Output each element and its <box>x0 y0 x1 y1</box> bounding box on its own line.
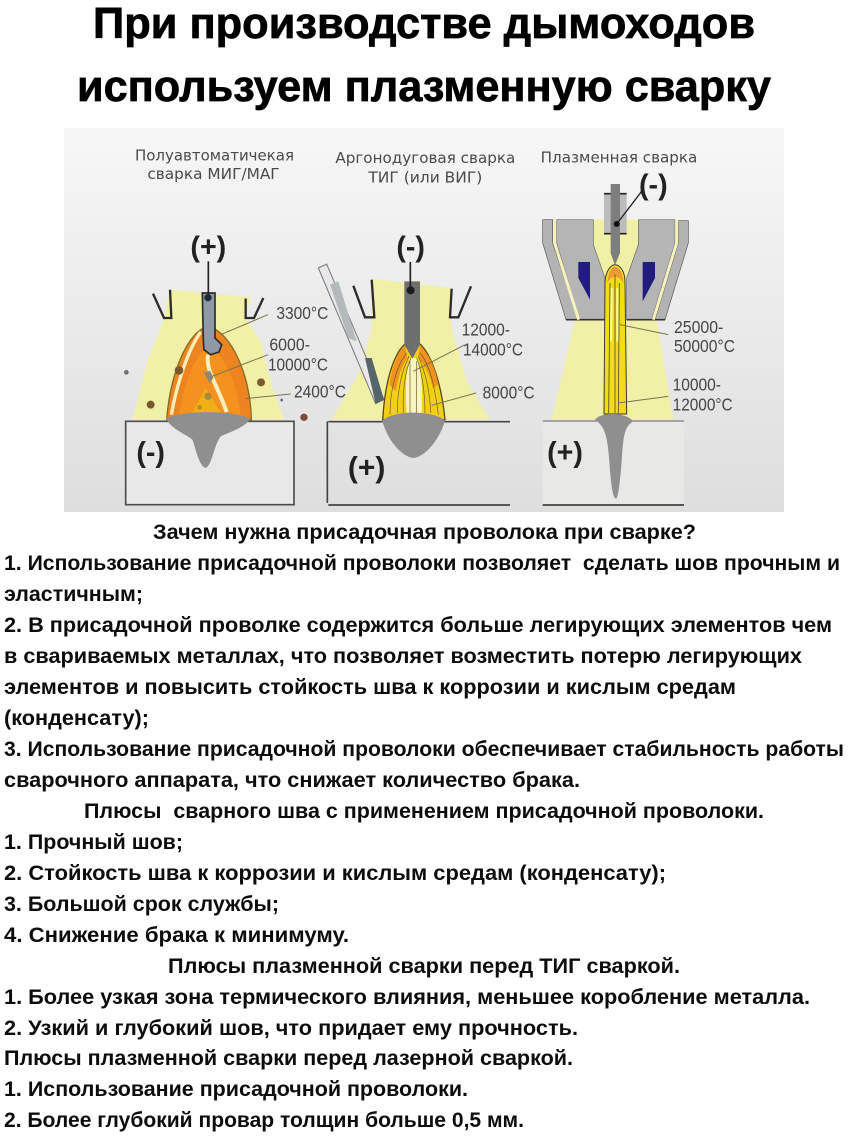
section: why filler wire is needed: в свариваемых металлах, что позволяет возместить потерю легирующих <box>4 645 802 668</box>
section: why filler wire is needed <box>4 521 844 792</box>
tungsten electrode <box>404 262 420 359</box>
plasma torch nozzle <box>543 220 688 320</box>
section: advantages of the seam with filler wire: 3. Большой срок службы; <box>4 893 279 916</box>
tungsten electrode <box>604 184 642 265</box>
filler rod <box>318 264 384 404</box>
panel: plasma welding <box>541 149 735 505</box>
caption: plasma: Плазменная сварка <box>541 149 697 166</box>
title: используем плазменную сварку <box>77 62 772 111</box>
temperature labels: 8000°C <box>483 383 535 403</box>
section: why filler wire is needed: элементов и повысить стойкость шва к коррозии и кислым средам <box>4 676 736 699</box>
section: why filler wire is needed: Зачем нужна присадочная проволока при сварке? <box>153 521 696 544</box>
caption: MIG/MAG: Полуавтоматичекая <box>135 147 294 164</box>
temperature labels: 14000°C <box>463 339 523 359</box>
section: plasma versus TIG <box>4 955 810 1040</box>
weld pool <box>166 412 251 468</box>
gas nozzles <box>353 280 471 317</box>
section: plasma versus TIG: 1. Более узкая зона термического влияния, меньшее коробление металла. <box>4 986 810 1009</box>
section: plasma versus laser: 1. Использование присадочной проволоки. <box>4 1078 468 1101</box>
spatter droplets <box>124 366 308 421</box>
polarity minus: (-) <box>639 170 668 202</box>
shielding gas <box>332 279 490 420</box>
temperature labels: 12000- <box>462 319 510 339</box>
temperature labels: 3300°C <box>276 303 328 323</box>
caption: MIG/MAG: сварка МИГ/МАГ <box>147 166 280 183</box>
section: why filler wire is needed: 1. Использование присадочной проволоки позволяет сделать шов прочным и <box>4 552 840 575</box>
section: advantages of the seam with filler wire <box>4 800 764 947</box>
weld pool <box>382 413 445 458</box>
section: plasma versus TIG: 2. Узкий и глубокий шов, что придает ему прочность. <box>4 1017 578 1040</box>
section: advantages of the seam with filler wire: 4. Снижение брака к минимуму. <box>4 924 349 947</box>
section: why filler wire is needed: (конденсату); <box>4 707 149 730</box>
insulator inserts <box>578 262 655 301</box>
temperature labels: 10000- <box>673 375 721 395</box>
temperature labels <box>212 303 346 401</box>
weld pool <box>595 414 633 499</box>
temperature labels: 6000- <box>269 335 310 355</box>
title <box>77 0 772 111</box>
caption: MIG/MAG <box>135 147 294 183</box>
caption: TIG: Аргонодуговая сварка <box>335 150 515 167</box>
section: why filler wire is needed: 3. Использование присадочной проволоки обеспечивает стабильность работы <box>4 738 844 761</box>
section: advantages of the seam with filler wire: 1. Прочный шов; <box>4 831 183 854</box>
panel: MIG/MAG welding <box>124 147 346 505</box>
section: why filler wire is needed: 2. В присадочной проволке содержится больше легирующих элементов чем <box>4 614 832 637</box>
gas nozzles <box>153 290 263 318</box>
shielding gas <box>132 290 284 420</box>
caption: TIG <box>335 150 515 186</box>
workpiece <box>543 421 684 505</box>
polarity minus: (-) <box>396 231 425 263</box>
section: plasma versus TIG: Плюсы плазменной сварки перед ТИГ сваркой. <box>168 955 680 978</box>
panel: TIG welding <box>318 150 535 505</box>
temperature labels: 12000°C <box>673 394 733 414</box>
section: why filler wire is needed: эластичным; <box>4 583 143 606</box>
panel: welding comparison diagram <box>64 128 784 512</box>
temperature labels: 50000°C <box>674 336 735 356</box>
section: plasma versus laser: 2. Более глубокий провар толщин больше 0,5 мм. <box>4 1109 524 1132</box>
workpiece <box>327 421 510 505</box>
shielding gas <box>552 220 673 420</box>
title: При производстве дымоходов <box>93 0 755 48</box>
section: plasma versus laser: Плюсы плазменной сварки перед лазерной сваркой. <box>4 1047 573 1070</box>
workpiece <box>126 421 294 505</box>
section: plasma versus laser <box>4 1047 573 1132</box>
electrode wire <box>202 261 222 355</box>
temperature labels: 2400°C <box>294 381 346 401</box>
flame <box>167 326 251 420</box>
polarity plus: (+) <box>190 231 226 263</box>
section: advantages of the seam with filler wire: 2. Стойкость шва к коррозии и кислым средам (конденсату); <box>4 862 666 885</box>
polarity plus: (+) <box>348 451 385 484</box>
polarity plus: (+) <box>547 437 583 469</box>
temperature labels <box>618 317 735 414</box>
flame <box>383 344 445 420</box>
temperature labels: 25000- <box>674 317 723 337</box>
text: article body <box>4 521 844 1132</box>
plasma arc <box>604 265 627 414</box>
temperature labels <box>413 319 535 405</box>
section: advantages of the seam with filler wire: Плюсы сварного шва с применением присадочной проволоки. <box>84 800 764 823</box>
section: why filler wire is needed: сварочного аппарата, что снижает количество брака. <box>4 769 580 792</box>
caption: TIG: ТИГ (или ВИГ) <box>367 169 482 186</box>
temperature labels: 10000°C <box>268 354 328 374</box>
polarity minus: (-) <box>136 437 165 469</box>
